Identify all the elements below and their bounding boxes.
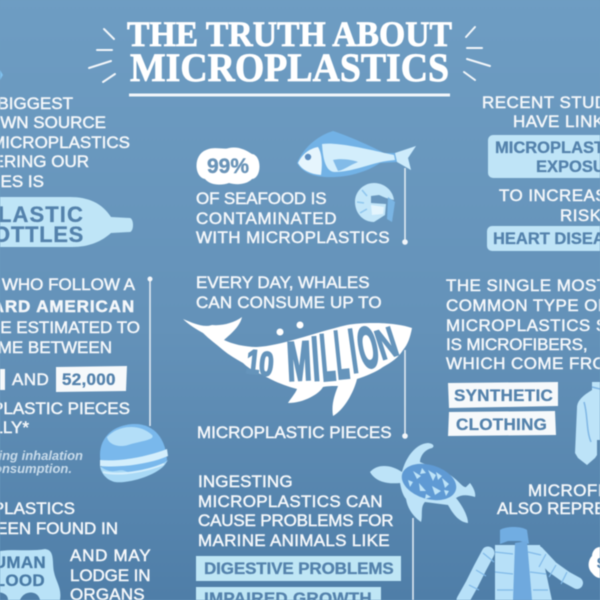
pin line: burger (148, 276, 152, 426)
text block: pieces annually (0, 399, 130, 437)
text block: seafood: CONTAMINATED (196, 209, 337, 228)
text block: also represent (497, 481, 600, 518)
icon: whale with 10 million: 0 (258, 346, 275, 384)
text block: to increased risk (499, 186, 600, 225)
text block: lodge in organs: AND MAY (70, 546, 151, 565)
text block: seafood: OF SEAFOOD IS (196, 189, 327, 208)
icon: turtle (370, 443, 475, 523)
callout: 52,000: 52,000 (62, 370, 116, 389)
title: THE TRUTH ABOUT (127, 14, 452, 54)
text block: ingesting: MARINE ANIMALS LIKE (198, 531, 390, 550)
icon: sweatshirt (575, 382, 600, 465)
text: microplastic pieces: MICROPLASTIC PIECES (197, 423, 392, 442)
callout: clothing: CLOTHING (456, 415, 547, 434)
callout: microplastic exposure (488, 135, 600, 178)
text block: standard american diet (0, 275, 140, 357)
callout: synthetic: SYNTHETIC (454, 386, 553, 405)
callout: lower bound (0, 369, 5, 390)
icon: jacket (463, 527, 577, 600)
text block: ingesting (198, 472, 394, 550)
callout: 99% cloud (196, 147, 260, 185)
text block: microfibers: IS MICROFIBERS, (446, 335, 588, 354)
callout: digestive problems: DIGESTIVE PROBLEMS (204, 559, 394, 578)
pin line: turtle (412, 518, 414, 600)
text block: ingesting: INGESTING (198, 472, 293, 491)
icon: plastic bottle (0, 197, 133, 247)
text block: ingesting: MICROPLASTICS CAN (198, 492, 383, 511)
text block: standard american diet: WHO FOLLOW A (2, 275, 136, 294)
text block: recent studies (482, 93, 600, 131)
icon: whale with 10 million: O (352, 315, 384, 382)
text block: whales: EVERY DAY, WHALES (196, 273, 370, 292)
pin line: whale (402, 350, 408, 439)
icon: whale with 10 million: I (310, 325, 322, 395)
text block: lodge in organs: LODGE IN (70, 566, 151, 585)
callout: partial white blob (589, 547, 600, 578)
icon: shrimp (355, 183, 395, 222)
text block: lodge in organs (70, 546, 151, 600)
icon: left title rays (89, 29, 115, 82)
callout: clothing (448, 411, 556, 436)
icon: human blood blob (0, 549, 60, 600)
icon: whale with 10 million: L (331, 316, 352, 393)
icon: whale with 10 million: L (317, 321, 338, 395)
text: and: AND (12, 370, 49, 389)
icon: whale with 10 million: 1 (244, 343, 262, 382)
icon: whale with 10 million: N (370, 319, 403, 369)
icon: whale with 10 million: I (345, 315, 361, 386)
icon: fish (297, 131, 416, 177)
icon: right title rays (464, 27, 490, 80)
text block: microfibers (446, 276, 600, 373)
title: MICROPLASTICS (130, 45, 449, 90)
text block: ingesting: CAUSE PROBLEMS FOR (198, 511, 394, 530)
text block: seafood (196, 189, 390, 247)
text block: whales: CAN CONSUME UP TO (196, 293, 382, 312)
callout: 99% cloud: 99% (207, 155, 249, 178)
callout: 52,000 (56, 366, 127, 392)
text block: found in blood (0, 499, 118, 538)
callout: heart disease (487, 226, 600, 251)
text block: biggest source (0, 94, 130, 191)
icon: burger (100, 424, 168, 482)
footnote (0, 448, 83, 476)
icon: partial droplet (0, 70, 3, 80)
callout: synthetic (448, 382, 558, 408)
title (127, 14, 452, 96)
icon: whale with 10 million: M (285, 331, 313, 393)
pin line: seafood (402, 168, 408, 245)
text block: whales (196, 273, 382, 312)
icon: whale with 10 million (183, 315, 412, 416)
text block: seafood: WITH MICROPLASTICS (196, 228, 390, 247)
